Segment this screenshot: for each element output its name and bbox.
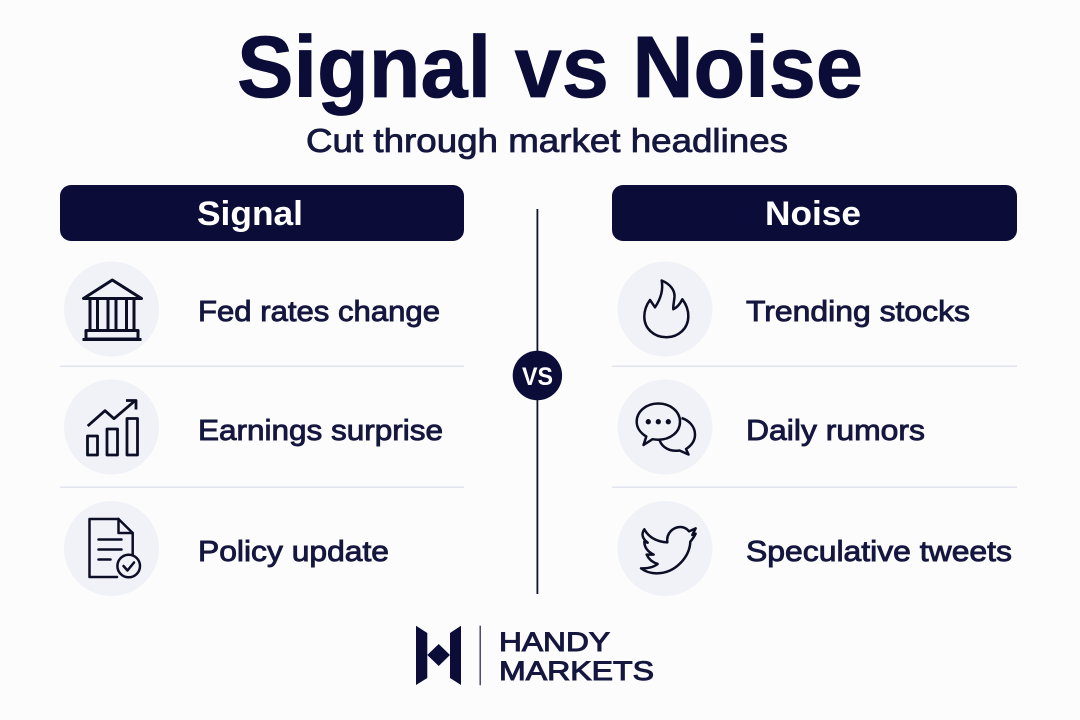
noise item: Daily rumors <box>618 380 925 474</box>
vs badge: VS <box>522 363 553 391</box>
noise item: Speculative tweets <box>618 501 1012 596</box>
logo: Handy Markets <box>416 626 654 686</box>
logo wordmark: HANDY <box>499 627 610 657</box>
title: Signal vs Noise <box>237 19 863 116</box>
signal header: Signal <box>197 195 303 233</box>
noise item: Trending stocks: Trending stocks <box>746 296 970 328</box>
noise header: Noise <box>765 195 861 233</box>
icon: bank <box>82 280 142 340</box>
noise item: Speculative tweets: Speculative tweets <box>746 536 1012 568</box>
logo wordmark <box>499 627 654 686</box>
icon: document with check <box>90 519 140 577</box>
signal item: Policy update <box>64 501 389 596</box>
panel: signal column <box>60 185 464 596</box>
icon: chat bubbles <box>637 404 695 454</box>
signal item: Policy update: Policy update <box>198 536 389 568</box>
signal header <box>60 185 464 241</box>
signal item: Earnings surprise <box>64 380 443 474</box>
logo wordmark: MARKETS <box>499 656 654 686</box>
noise item: Daily rumors: Daily rumors <box>746 415 925 447</box>
signal item: Fed rates change: Fed rates change <box>198 296 440 328</box>
subtitle: Cut through market headlines <box>306 122 788 159</box>
noise item: Trending stocks <box>618 262 970 356</box>
logo mark <box>416 626 461 685</box>
icon: bird <box>641 527 696 573</box>
panel: noise column <box>612 185 1017 596</box>
signal item: Earnings surprise: Earnings surprise <box>198 415 443 447</box>
signal item: Fed rates change <box>64 262 440 356</box>
center divider line <box>536 209 538 594</box>
noise header <box>612 185 1017 241</box>
icon: flame <box>644 280 688 337</box>
vs badge <box>513 351 562 400</box>
icon: rising chart <box>88 400 138 455</box>
